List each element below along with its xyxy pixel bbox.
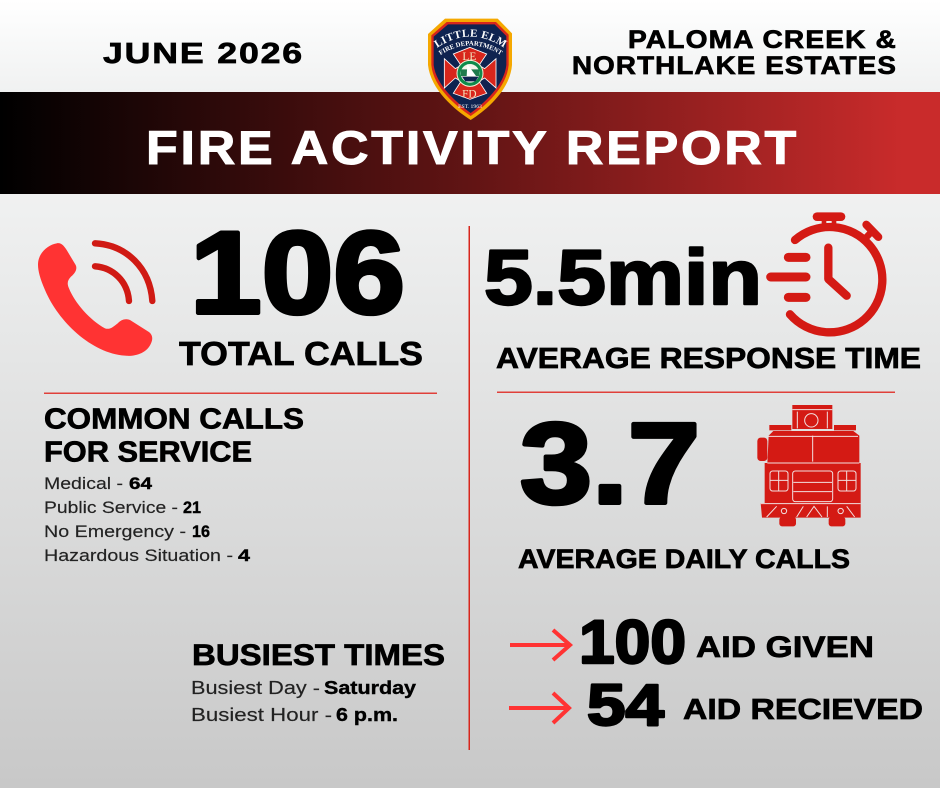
title: FIRE ACTIVITY REPORT — [146, 121, 799, 174]
busiest times list: 6 p.m. — [336, 704, 398, 725]
busiest times list — [191, 677, 417, 725]
common calls heading — [44, 404, 304, 468]
red title band — [0, 92, 940, 194]
common calls list: 16 — [192, 522, 210, 541]
common calls list — [44, 474, 251, 565]
total calls label: TOTAL CALLS — [179, 335, 423, 372]
total calls number: 106 — [190, 207, 405, 338]
area heading: NORTHLAKE ESTATES — [572, 52, 897, 80]
icon: fire truck — [757, 405, 861, 526]
area heading: PALOMA CREEK & — [628, 26, 897, 54]
icon: fire department badge: EST. 1963 — [458, 104, 482, 110]
common calls list: 4 — [238, 546, 251, 565]
icon: fire department badge: LE — [462, 51, 476, 63]
aid received label: AID RECIEVED — [683, 694, 923, 726]
aid given label: AID GIVEN — [696, 631, 874, 664]
panel: busiest times — [191, 639, 445, 725]
daily calls label: AVERAGE DAILY CALLS — [518, 544, 850, 574]
common calls heading: COMMON CALLS — [44, 404, 304, 436]
column divider — [468, 226, 470, 750]
icon: fire department badge: FD — [462, 88, 477, 100]
aid given number: 100 — [579, 608, 686, 676]
arrow: aid received — [509, 693, 569, 723]
common calls list: 21 — [183, 498, 201, 517]
panel: total calls — [38, 207, 423, 372]
icon: fire department badge: FIRE DEPARTMENT — [438, 40, 503, 55]
date heading: JUNE 2026 — [103, 38, 304, 70]
icon: fire department badge — [428, 18, 512, 120]
panel: average daily calls — [518, 400, 861, 574]
common calls list: 64 — [129, 474, 153, 493]
area heading — [572, 26, 897, 80]
icon: stopwatch — [771, 217, 882, 332]
arrow: aid given — [510, 630, 570, 660]
icon: phone — [38, 243, 152, 356]
aid received number: 54 — [587, 673, 664, 738]
daily calls value: 3.7 — [520, 400, 700, 528]
response time value: 5.5min — [484, 233, 762, 321]
common calls list: Medical - — [44, 474, 123, 493]
busiest times heading: BUSIEST TIMES — [192, 639, 445, 672]
busiest times list: Busiest Day - — [191, 677, 320, 698]
icon: fire department badge: LITTLE ELM — [433, 29, 508, 48]
busiest times list: Busiest Hour - — [191, 704, 332, 725]
common calls list: Hazardous Situation - — [44, 546, 233, 565]
common calls list: No Emergency - — [44, 522, 186, 541]
panel: aid received — [509, 673, 923, 738]
common calls list: Public Service - — [44, 498, 178, 517]
response time label: AVERAGE RESPONSE TIME — [496, 343, 921, 375]
panel: aid given — [510, 608, 874, 676]
common calls heading: FOR SERVICE — [44, 436, 252, 468]
panel: common calls for service — [44, 404, 304, 565]
busiest times list: Saturday — [324, 677, 417, 698]
panel: average response time — [484, 217, 921, 375]
